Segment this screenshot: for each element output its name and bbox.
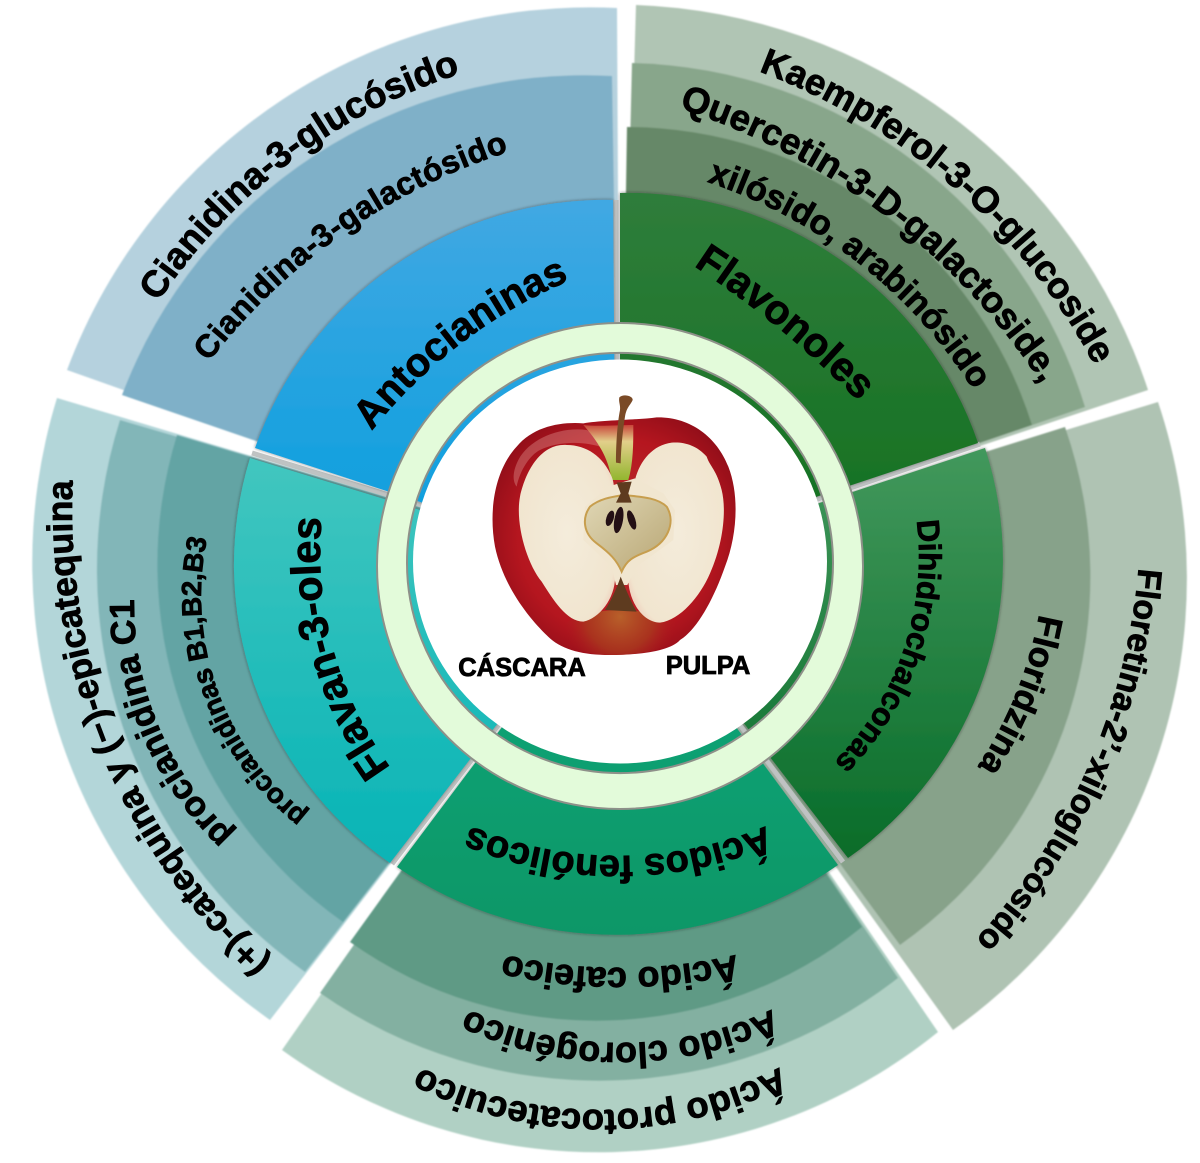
label: Acido cafeico: Ácido cafeico: [502, 954, 736, 993]
heading: Antocianinas: Antocianinas: [357, 264, 566, 431]
top calyx: [616, 482, 632, 503]
pale ring around the center: [377, 323, 863, 809]
label: Acido protocatecuico: Ácido protocatecuico: [416, 1067, 783, 1134]
band: middle grey green: [620, 427, 1090, 945]
seeds: [604, 506, 638, 534]
wedge: Acidos fenolicos heading wedge: [397, 570, 838, 935]
apple skin: [493, 417, 736, 655]
panel: Acidos fenolicos sector: [282, 566, 938, 1152]
band: third teal green: [320, 566, 898, 1081]
label: xilosido, arabinosido: xilósido, arabinósido: [706, 164, 986, 386]
panel: Antocianinas sector: [67, 7, 620, 566]
wedge: Flavan-3-oles heading wedge: [234, 458, 616, 863]
icon: halved red apple: [493, 395, 736, 655]
label: Cianidina-3-glucosido: Cianidina-3-glucósido: [142, 56, 457, 297]
band: third teal: [97, 420, 620, 972]
wedge: Flavonoles heading wedge: [620, 193, 978, 562]
skin highlight: [514, 429, 605, 487]
left flesh: [519, 445, 615, 622]
bottom warm glow: [557, 610, 687, 655]
band: outer pale green: [620, 5, 1148, 566]
heading: Flavonoles: Flavonoles: [695, 243, 870, 398]
green dimple: [583, 425, 633, 480]
label: procianidinas B1,B2,B3: procianidinas B1,B2,B3: [181, 536, 310, 825]
band: second teal: [157, 435, 620, 922]
label: CASCARA: CÁSCARA: [458, 653, 586, 682]
band: second green: [620, 127, 1032, 566]
cream around the core: [583, 478, 675, 585]
label: procianidina C1: procianidina C1: [110, 600, 238, 846]
label: Kaempferol-3-O-glucoside: Kaempferol-3-O-glucoside: [760, 48, 1109, 362]
right flesh: [628, 442, 724, 623]
heading: Flavan-3-oles: Flavan-3-oles: [290, 518, 390, 782]
band: middle blue: [122, 75, 620, 566]
center white disc: [413, 360, 827, 764]
core: [585, 495, 671, 572]
label: Acido clorogenico: Ácido clorogénico: [464, 1009, 774, 1069]
band: outer pale teal: [32, 398, 620, 1020]
panel: Flavonoles sector: [620, 5, 1148, 566]
band: third green: [620, 63, 1085, 566]
label: Floretina-2'-xiloglucosido: Floretina-2’-xiloglucósido: [979, 570, 1162, 948]
bottom calyx: [605, 577, 637, 612]
wedge: Antocianinas heading wedge: [255, 200, 616, 566]
label: catequina y epicatequina: (+)-catequina y (−)-epicatequina: [46, 480, 271, 977]
band: outer pale green: [620, 402, 1187, 1030]
label: PULPA: PULPA: [666, 652, 750, 680]
panel: Dihidrochalconas sector: [620, 402, 1187, 1030]
label: Quercetin-3-D-galactoside: Quercetin-3-D-galactoside,: [683, 87, 1049, 384]
stem: [616, 395, 633, 463]
panel: Flavan-3-oles sector: [32, 398, 620, 1020]
heading: Acidos fenolicos: Ácidos fenólicos: [466, 826, 767, 884]
label: Cianidina-3-galactosido: Cianidina-3-galactósido: [196, 136, 506, 358]
heading: Dihidrochalconas: Dihidrochalconas: [836, 520, 942, 771]
label: Floridzina: Floridzina: [978, 616, 1063, 772]
band: outer pale teal green: [282, 566, 938, 1152]
band: outer pale blue: [67, 7, 620, 566]
band: second teal green: [350, 566, 862, 1021]
wedge: Dihidrochalconas heading wedge: [624, 448, 1003, 858]
